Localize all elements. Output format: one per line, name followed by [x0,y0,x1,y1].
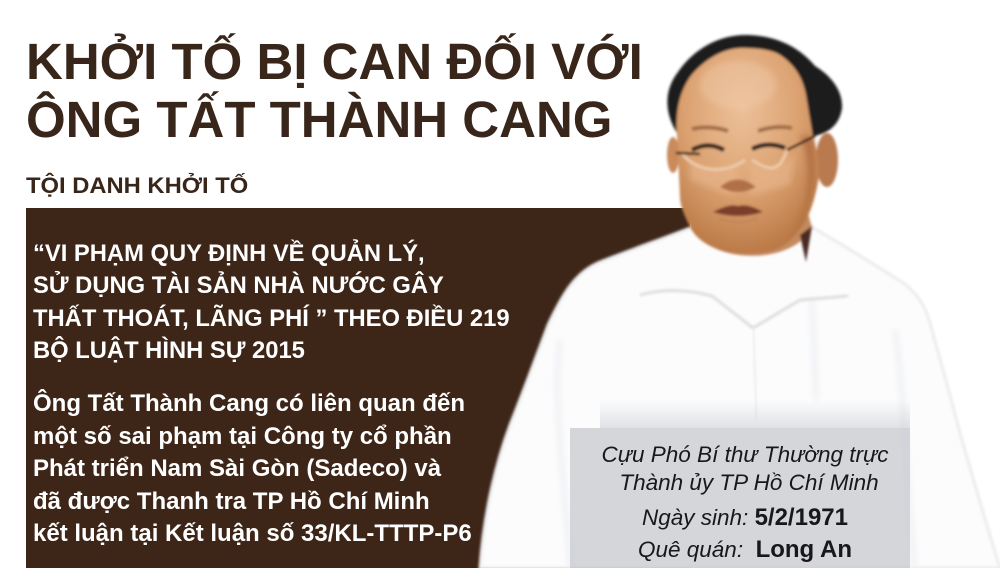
title: KHỞI TỐ BỊ CAN ĐỐI VỚI [26,33,643,90]
text block: details: Ông Tất Thành Cang có liên quan đến [33,390,465,417]
text block: charge quote [33,239,510,364]
cheek shadow [790,135,815,238]
caption box [570,428,910,568]
text block: details [33,389,472,547]
subheading: charge: TỘI DANH KHỞI TỐ [26,173,248,198]
neck [695,205,812,256]
text block: details: Phát triển Nam Sài Gòn (Sadeco) và [33,455,441,482]
forehead highlight [700,61,776,109]
caption text: Thành ủy TP Hồ Chí Minh [619,470,879,495]
text block: details: đã được Thanh tra TP Hồ Chí Minh [33,488,430,515]
face [677,48,819,254]
title [26,33,643,148]
text block: details: một số sai phạm tại Công ty cổ phần [33,423,452,450]
text block: charge quote: BỘ LUẬT HÌNH SỰ 2015 [33,337,305,364]
text block: charge quote: SỬ DỤNG TÀI SẢN NHÀ NƯỚC GÂY [33,272,444,299]
mouth [713,205,763,216]
ears [667,137,679,173]
panel: dark background [26,208,690,568]
text block: charge quote: THẤT THOÁT, LÃNG PHÍ ” THEO ĐIỀU 219 [33,305,510,332]
brows [692,127,792,131]
caption text: Cựu Phó Bí thư Thường trực [602,442,888,467]
shirt [480,222,1000,568]
under eye and brow shading [690,155,795,195]
text block: charge quote: “VI PHẠM QUY ĐỊNH VỀ QUẢN LÝ, [33,240,425,266]
caption text: Ngày sinh: 5/2/1971 [642,504,848,531]
nose [720,180,756,192]
caption text: Quê quán: Long An [638,536,852,563]
eyes [692,145,785,150]
head [667,35,842,262]
title: ÔNG TẤT THÀNH CANG [26,91,612,148]
glasses [676,136,815,170]
caption fade [600,400,910,428]
text block: details: kết luận tại Kết luận số 33/KL-TTTP-P6 [33,520,472,547]
caption text [602,442,888,563]
hair [667,35,842,136]
